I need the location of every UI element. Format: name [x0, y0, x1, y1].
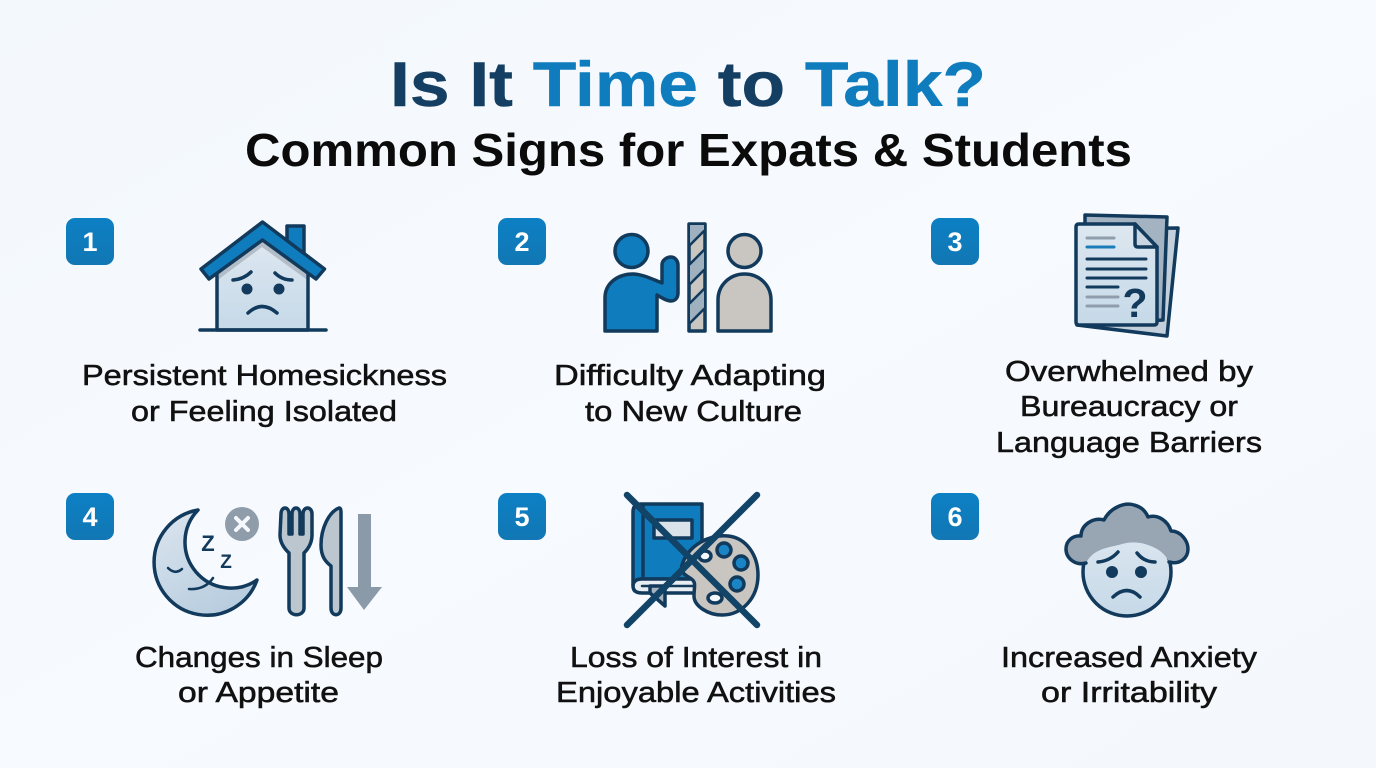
number badge 2: 2	[514, 227, 530, 257]
label 1: Persistent Homesickness	[82, 360, 447, 392]
label 2: to New Culture	[585, 396, 802, 428]
label 5: Loss of Interest in	[570, 642, 822, 674]
label 6: or Irritability	[1041, 677, 1218, 709]
label 1	[82, 360, 447, 428]
label 6: Increased Anxiety	[1001, 642, 1258, 674]
label 2	[554, 360, 826, 428]
number badge 6: 6	[947, 502, 963, 532]
icon: fork and knife	[280, 508, 341, 615]
label 4: Changes in Sleep	[135, 642, 383, 674]
title block	[245, 50, 1132, 176]
panel: sign 5 loss of interest	[498, 493, 836, 709]
number badge 5: 5	[514, 502, 530, 532]
number badge 3	[931, 218, 979, 265]
panel: sign 1 homesickness	[66, 218, 447, 428]
number badge 1: 1	[82, 227, 98, 257]
label 5: Enjoyable Activities	[556, 677, 836, 709]
icon: sleeping moon: Z	[220, 552, 232, 573]
label 2: Difficulty Adapting	[554, 360, 826, 392]
number badge 4	[66, 493, 114, 540]
number badge 2	[498, 218, 546, 265]
label 3: Overwhelmed by	[1005, 356, 1254, 388]
label 5	[556, 642, 836, 709]
label 3: Language Barriers	[996, 427, 1262, 459]
subtitle: Common Signs for Expats & Students	[245, 124, 1132, 176]
number badge 4: 4	[82, 502, 98, 532]
icon: down arrow	[347, 514, 382, 610]
main title: Is It Time to Talk?	[390, 50, 986, 120]
panel: sign 6 anxiety	[931, 493, 1258, 709]
icon: people separated by barrier	[605, 224, 771, 331]
number badge 1	[66, 218, 114, 265]
number badge 5	[498, 493, 546, 540]
label 1: or Feeling Isolated	[131, 396, 397, 428]
panel: sign 4 sleep and appetite	[66, 493, 383, 709]
panel: sign 3 bureaucracy	[931, 215, 1262, 459]
label 3	[996, 356, 1262, 459]
icon: sleeping moon	[154, 507, 259, 615]
label 3: Bureaucracy or	[1020, 391, 1238, 423]
number badge 3: 3	[947, 227, 963, 257]
panel: sign 2 culture	[498, 218, 826, 428]
icon: sad house	[200, 222, 326, 330]
label 4: or Appetite	[178, 677, 339, 709]
icon: stack of documents with question mark	[1076, 215, 1178, 336]
label 6	[1001, 642, 1258, 709]
icon: crossed-out book and palette	[627, 495, 758, 625]
icon: stack of documents with question mark: ?	[1122, 280, 1148, 326]
label 4	[135, 642, 383, 709]
icon: sleeping moon: Z	[201, 531, 215, 556]
number badge 6	[931, 493, 979, 540]
icon: anxious face with cloud	[1066, 504, 1188, 616]
